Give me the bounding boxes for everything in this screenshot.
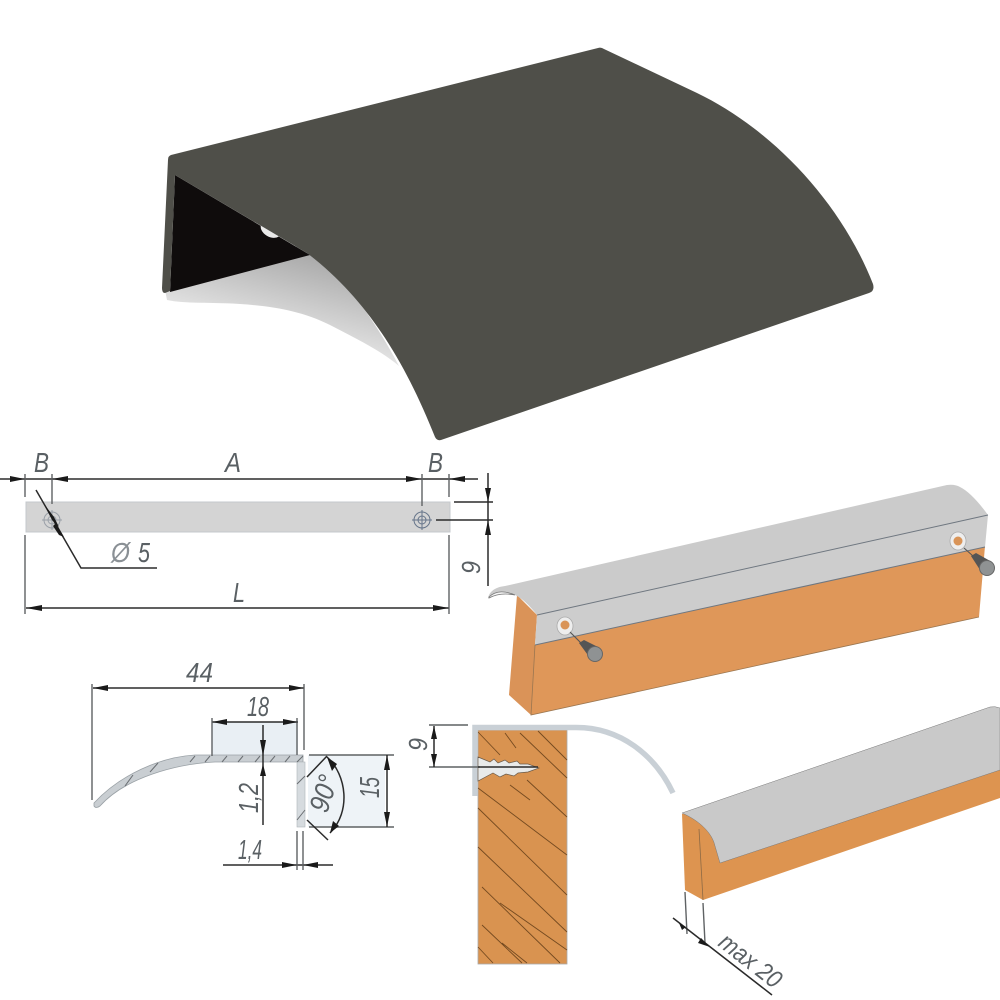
dimension max 20 — [673, 892, 787, 995]
hole right — [412, 510, 432, 530]
handle profile section — [475, 727, 673, 796]
dimension 1,2 — [233, 725, 266, 825]
screw right — [964, 548, 994, 576]
dimension 1,2: 1,2 — [233, 783, 264, 813]
wood hatching — [478, 731, 567, 963]
plan view drawing — [0, 447, 493, 614]
section hatching — [125, 756, 305, 820]
corner edge — [699, 829, 703, 900]
door edge — [531, 617, 979, 715]
handle inner back face — [170, 175, 310, 292]
door body — [682, 768, 1000, 900]
handle top surface — [682, 707, 1000, 863]
dimension A and B lines: A — [223, 447, 241, 478]
angle 90 degrees: 90° — [303, 771, 344, 816]
routed door view: max 20 — [673, 707, 1000, 995]
angle 90 degrees — [303, 756, 344, 840]
screw hole left — [557, 617, 573, 635]
dimension 18 — [212, 691, 298, 756]
dimension boxes pale fill — [212, 722, 298, 755]
profile section drawing — [92, 657, 394, 870]
wood block — [478, 730, 567, 964]
dimension 9 section — [403, 725, 538, 767]
profile flange — [297, 762, 305, 827]
dimension A and B lines — [0, 447, 478, 506]
profile section — [94, 755, 303, 808]
screw left — [570, 632, 602, 662]
assembled view: handle on door with screws — [488, 485, 994, 715]
leader: diameter 5: Ø — [110, 537, 132, 568]
dimension A and B lines: B — [34, 447, 49, 478]
dimension 15 — [309, 755, 394, 827]
shadow under handle — [165, 245, 399, 366]
leader: diameter 5: 5 — [138, 537, 150, 568]
dimension max 20: max 20 — [713, 928, 787, 994]
dimension 9 section: 9 — [403, 738, 433, 751]
mounting hole — [257, 217, 285, 241]
dimension 18: 18 — [247, 691, 269, 722]
dimension 9 — [436, 473, 493, 586]
handle curved top — [488, 485, 988, 615]
dimension 44 — [92, 657, 304, 800]
door side face — [509, 595, 537, 715]
dimension 44: 44 — [186, 657, 213, 688]
handle end lip highlight — [489, 592, 515, 598]
screw section — [478, 757, 539, 781]
dimension 1,4 — [223, 831, 333, 870]
flange edges — [535, 515, 988, 645]
handle front flange — [535, 515, 988, 645]
dimension A and B lines: B — [428, 447, 443, 478]
screw hole right — [950, 532, 966, 550]
hole left — [42, 510, 62, 530]
door front face — [531, 546, 985, 715]
dimension L — [25, 535, 449, 614]
dimension 15: 15 — [354, 777, 385, 798]
dimension L: L — [233, 577, 245, 608]
product photo: dark handle — [162, 48, 874, 440]
handle top surface — [162, 48, 874, 440]
dimension 9: 9 — [456, 561, 486, 574]
plan view bar — [26, 502, 450, 532]
dimension 1,4: 1,4 — [238, 834, 262, 865]
leader: diameter 5 — [36, 490, 157, 568]
section view: handle screwed on wood — [403, 725, 673, 964]
